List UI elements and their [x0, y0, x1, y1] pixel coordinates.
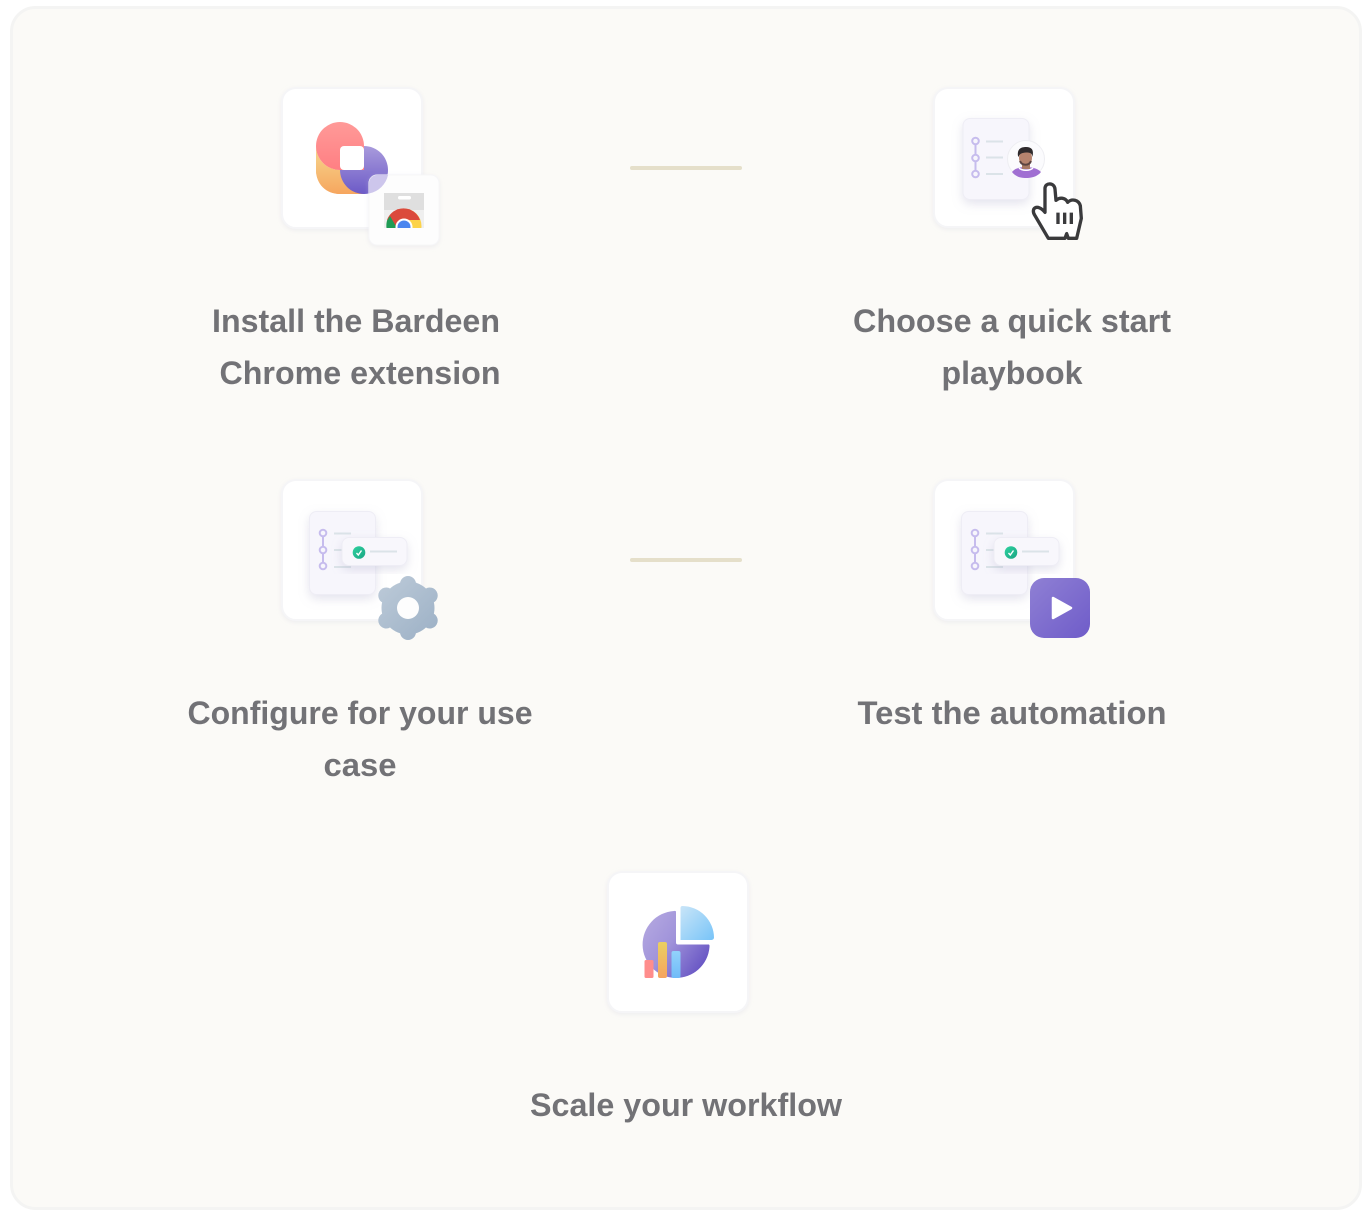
step 2 label [853, 303, 1171, 391]
icon tile: pie and bar chart [608, 872, 748, 1012]
step 2 label: Choose a quick start [853, 303, 1171, 339]
step 1 label: Chrome extension [220, 355, 500, 391]
step 3: configure [188, 480, 532, 783]
step 5: scale [530, 872, 842, 1123]
icon badge: Chrome web store [369, 175, 439, 245]
icon tile: playbook with check [282, 480, 422, 620]
icon tile: playbook with avatar [934, 88, 1081, 238]
step 4 label: Test the automation [858, 695, 1166, 731]
step 5 label: Scale your workflow [530, 1087, 842, 1123]
step 1 label [212, 303, 500, 391]
step 3 label: case [324, 747, 396, 783]
avatar [1008, 140, 1044, 178]
connector: step 3 to step 4 [630, 558, 742, 562]
step 2 label: playbook [942, 355, 1083, 391]
icon: play button [1030, 578, 1090, 638]
icon tile: playbook with check [934, 480, 1074, 620]
step 1: install extension [214, 122, 499, 384]
step 2: choose playbook [853, 88, 1171, 391]
step 1 label: Install the Bardeen [212, 303, 500, 339]
cursor hand [1033, 184, 1081, 238]
step 3 label: Configure for your use [188, 695, 532, 731]
step 3 label [188, 695, 532, 783]
icon tile: Bardeen logo [282, 88, 422, 228]
icon: gear [382, 582, 434, 634]
step 4: test [858, 480, 1166, 731]
connector: step 1 to step 2 [630, 166, 742, 170]
